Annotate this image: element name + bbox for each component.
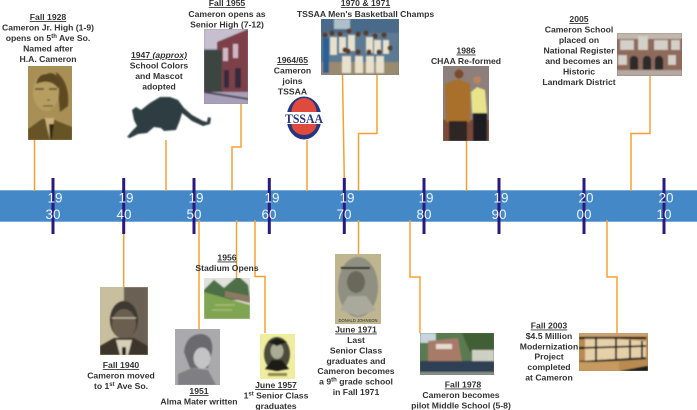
caption: Fall 2003 (531, 320, 567, 330)
caption: June 1971 (335, 324, 377, 334)
caption: June 1957 (255, 380, 297, 390)
photo: middle school crowd (420, 333, 494, 375)
caption: Project (534, 352, 564, 362)
event: 1951 Alma Mater (160, 329, 238, 406)
caption: at Cameron (525, 372, 573, 382)
caption: th (51, 34, 57, 40)
event: 1970 & 1971 basketball champs (297, 0, 434, 75)
caption: th (331, 378, 337, 384)
event: 1986 CHAA (431, 46, 501, 141)
photo: stadium field (204, 276, 250, 319)
event: 1964/65 TSSAA (274, 55, 324, 140)
photo: modernized windows (579, 333, 648, 371)
decade labels: 19 (188, 190, 204, 206)
event: Fall 1955 (188, 0, 266, 104)
decade labels: 40 (116, 207, 132, 222)
caption: 1986 (456, 46, 476, 56)
event: Fall 1978 (411, 333, 511, 410)
event: June 1971 (317, 254, 395, 397)
caption: graduates and (327, 356, 385, 366)
decade labels: 19 (47, 190, 63, 206)
caption: in Fall 1971 (333, 387, 379, 397)
caption: grade school (337, 376, 393, 386)
decade labels: 50 (186, 207, 202, 222)
caption: Alma Mater written (160, 396, 238, 406)
caption: Last (347, 335, 365, 345)
photo: H.A. Cameron portrait (28, 66, 72, 140)
caption: $4.5 Million (526, 331, 572, 341)
decade labels: 90 (491, 207, 507, 222)
caption: opens on 5 (6, 33, 90, 43)
caption: Senior High (7-12) (190, 20, 264, 30)
caption: Cameron (274, 66, 311, 76)
decade labels: 19 (418, 190, 434, 206)
decade labels: 60 (261, 207, 277, 222)
photo: school building (204, 29, 248, 104)
caption: Stadium Opens (195, 263, 259, 273)
caption: and Mascot (135, 71, 183, 81)
caption: 1964/65 (277, 55, 308, 65)
decade labels (45, 190, 674, 222)
caption: Cameron becomes (422, 390, 500, 400)
caption: Fall 1940 (103, 360, 139, 370)
decade labels: 20 (658, 190, 674, 206)
decade labels: 19 (493, 190, 509, 206)
caption: Cameron moved (87, 370, 155, 380)
event: Fall 1928 (2, 12, 94, 140)
icon: black panther (127, 97, 211, 138)
caption: National Register (544, 46, 615, 56)
caption: st (248, 392, 254, 398)
event: 2005 historic district (542, 14, 682, 87)
caption: Ave So. (115, 381, 148, 391)
photo: school facade (617, 33, 682, 76)
caption: 1956 (217, 252, 237, 262)
event: June 1957 (244, 334, 309, 410)
caption: placed on (559, 35, 599, 45)
caption: to 1 (94, 381, 148, 391)
caption: joins (281, 76, 303, 86)
decade labels: 70 (336, 207, 352, 222)
decade labels: 20 (578, 190, 594, 206)
caption: Modernization (520, 342, 578, 352)
caption: H.A. Cameron (19, 54, 77, 64)
decade labels: 19 (118, 190, 134, 206)
caption: Senior Class (254, 390, 309, 400)
event: 1947 mascot (127, 50, 211, 138)
event: Fall 1940 (87, 287, 155, 391)
photo: portrait (175, 329, 220, 385)
caption: School Colors (130, 60, 188, 70)
caption: 1 (244, 390, 309, 400)
photo: award presentation (443, 66, 489, 141)
caption: Landmark District (542, 77, 616, 87)
timeline band (0, 190, 697, 222)
decade labels: 10 (656, 207, 672, 222)
caption: Historic (563, 66, 595, 76)
connector lines above the band (34, 75, 650, 191)
caption: CHAA Re-formed (431, 56, 501, 66)
connector lines below the band (124, 220, 617, 333)
caption: 1947 (approx) (131, 50, 187, 60)
caption: Fall 1928 (30, 12, 66, 22)
caption: Senior Class (330, 346, 382, 356)
caption: completed (527, 362, 571, 372)
caption: TSSAA (278, 86, 307, 96)
caption: a 9 (319, 376, 393, 386)
photo: portrait (100, 287, 148, 355)
caption: Named after (23, 44, 74, 54)
caption: st (109, 382, 115, 388)
decade labels: 30 (45, 207, 61, 222)
icon: TSSAA logo: TSSAA (285, 111, 324, 126)
caption: 2005 (569, 14, 589, 24)
caption: Cameron opens as (188, 9, 266, 19)
decade labels: 00 (576, 207, 592, 222)
decade labels: 19 (264, 190, 280, 206)
decade ticks (52, 178, 666, 234)
event: Fall 2003 (520, 320, 648, 382)
photo: Donald Johnson portrait: DONALD JOHNSON (338, 318, 378, 323)
photo: basketball team (321, 19, 399, 75)
decade labels: 19 (339, 190, 355, 206)
caption: Ave So. (57, 33, 90, 43)
decade labels: 80 (416, 207, 432, 222)
photo: graduate portrait (260, 334, 295, 379)
caption: adopted (142, 82, 176, 92)
caption: and becomes an (545, 56, 613, 66)
caption: TSSAA Men's Basketball Champs (297, 9, 434, 19)
event: 1956 Stadium (195, 252, 259, 319)
caption: 1951 (189, 386, 209, 396)
caption: Cameron Jr. High (1-9) (2, 22, 94, 32)
caption: Cameron becomes (317, 366, 395, 376)
caption: Fall 1978 (445, 380, 481, 390)
caption: Cameron School (545, 24, 613, 34)
photo: Donald Johnson portrait (335, 254, 381, 324)
